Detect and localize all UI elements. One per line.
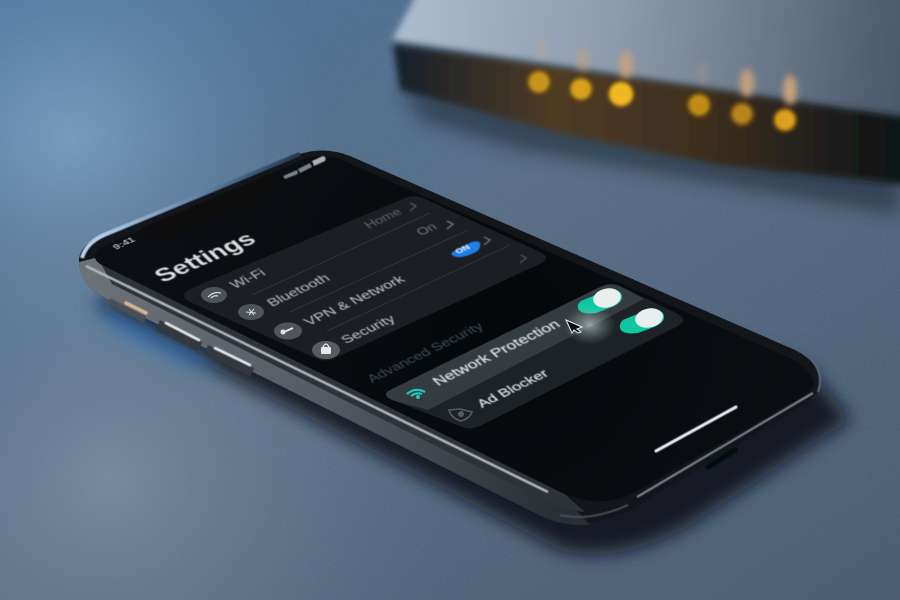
router LEDs [526,69,798,133]
glow around cursor [564,305,616,345]
row: Bluetooth: Bluetooth [264,272,334,310]
blue glow under phone edge [88,295,220,372]
status bar icons [283,156,326,179]
phone shadow [95,180,850,554]
phone right chassis edge [637,393,813,497]
row: Wi-Fi [201,267,268,303]
notch [142,175,280,240]
phone screen [95,156,814,502]
bottom corner rim [560,505,628,517]
label: Network Protection: Network Protection [430,318,564,389]
row: Wi-Fi: Wi-Fi [227,267,268,291]
charging port [708,450,735,467]
status bar time: 9:41 [111,236,138,252]
phone side lower dark band [100,262,585,512]
icon: shield [449,409,472,421]
badge: ON [452,242,480,257]
router front face [393,44,900,185]
phone bright chrome rim [86,266,548,492]
row dividers [252,213,510,331]
icon: cursor arrow [566,320,582,333]
row: VPN & Network: VPN & Network [301,273,409,329]
phone [79,150,820,525]
title: Settings: Settings [149,228,261,287]
value: On: On [413,221,440,238]
label: Ad Blocker: Ad Blocker [474,367,552,411]
row: Security [312,313,400,359]
panel: settings list [184,196,546,360]
row: Security: Security [338,313,400,347]
toggle: Ad Blocker [620,306,665,333]
router: blurred device with amber LEDs [392,0,900,215]
phone side metal band [79,258,590,525]
row: Network Protection highlight [386,284,644,410]
side buttons [108,298,254,377]
badge: ON: ON [453,243,472,255]
phone body [79,150,820,522]
router LED reflections [536,41,797,105]
toggle: Network Protection [578,286,623,313]
row: Bluetooth [238,272,334,320]
router top surface [392,0,900,118]
icon: teal Wi-Fi [407,390,425,396]
row: VPN & Network [274,273,409,340]
value: Home: Home [361,206,405,231]
panel: advanced security [386,284,683,428]
home indicator [656,407,736,451]
section label: Advanced Security: Advanced Security [364,320,486,385]
